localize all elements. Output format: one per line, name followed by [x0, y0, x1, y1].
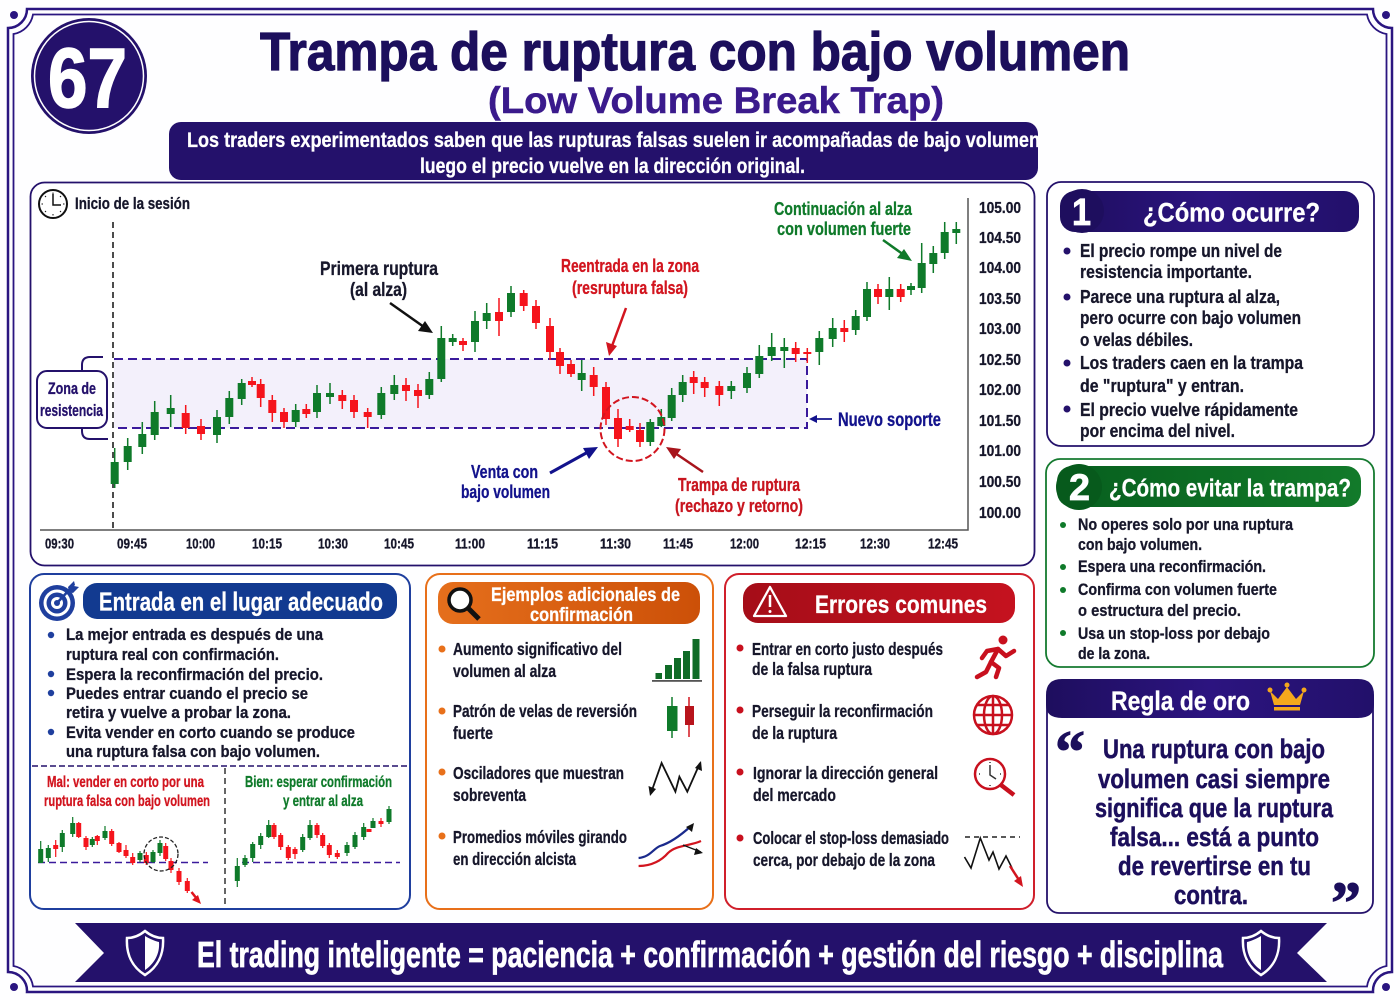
icon: shield right — [1243, 931, 1279, 975]
good example: y entrar al alza — [283, 793, 363, 810]
header: Errores comunes — [815, 591, 987, 619]
time axis labels — [45, 536, 958, 552]
panel: como evitar — [1046, 459, 1374, 667]
quote text: contra. — [1174, 880, 1248, 910]
bullet list: Aumento significativo del — [453, 639, 622, 659]
title: Trampa de ruptura con bajo volumen — [260, 22, 1130, 82]
price axis labels: 102.50 — [979, 352, 1021, 369]
annotation: venta con bajo volumen: Venta con — [471, 462, 538, 482]
annotation: venta con bajo volumen — [461, 447, 598, 502]
intro banner: luego el precio vuelve en la dirección original. — [420, 155, 805, 178]
bullet list: ruptura real con confirmación. — [66, 645, 279, 664]
bullet list — [48, 625, 355, 761]
bullet list: Confirma con volumen fuerte — [1078, 580, 1277, 599]
price axis labels: 104.50 — [979, 230, 1021, 247]
icon: tight stop-loss — [964, 837, 1023, 887]
panel: regla de oro: Regla de oro — [1111, 686, 1250, 716]
bullet list: resistencia importante. — [1080, 262, 1252, 282]
bullet list: fuerte — [453, 723, 493, 743]
resistance zone label: resistencia — [40, 401, 103, 420]
bullet list: o velas débiles. — [1080, 330, 1193, 350]
time axis labels: 10:45 — [384, 536, 414, 552]
annotation: primera ruptura — [320, 259, 438, 333]
bullet list: El precio vuelve rápidamente — [1080, 400, 1298, 420]
bullet list: retira y vuelve a probar la zona. — [66, 703, 291, 722]
quote text: falsa... está a punto — [1110, 822, 1319, 852]
bullet list: Parece una ruptura al alza, — [1080, 287, 1280, 307]
quote text: de revertirse en tu — [1118, 851, 1311, 881]
bullet list: Los traders caen en la trampa — [1080, 353, 1304, 373]
bullet list: Usa un stop-loss por debajo — [1078, 624, 1270, 643]
bullet list: Entrar en corto justo después — [752, 639, 943, 659]
axes — [40, 198, 968, 530]
annotation: reentrada: Reentrada en la zona — [561, 256, 700, 276]
price axis labels: 101.50 — [979, 413, 1021, 430]
time axis labels: 11:45 — [663, 536, 693, 552]
bullet list: Puedes entrar cuando el precio se — [66, 684, 308, 703]
annotation: trampa de ruptura: Trampa de ruptura — [678, 475, 801, 495]
time axis labels: 09:30 — [45, 536, 74, 552]
header 1 — [1060, 189, 1359, 234]
subtitle: (Low Volume Break Trap) — [488, 80, 944, 121]
time axis labels: 10:15 — [252, 536, 282, 552]
bullet list: Patrón de velas de reversión — [453, 701, 637, 721]
bullet list: o estructura del precio. — [1078, 601, 1241, 620]
bullet list: La mejor entrada es después de una — [66, 625, 323, 644]
icon: moving averages — [639, 823, 703, 866]
header 1: ¿Cómo ocurre? — [1143, 198, 1320, 228]
time axis labels: 12:15 — [795, 536, 826, 552]
bullet list: de la ruptura — [752, 723, 837, 743]
bullet list: una ruptura falsa con bajo volumen. — [66, 742, 320, 761]
time axis labels: 10:00 — [186, 536, 215, 552]
resistance zone label: Zona de — [48, 379, 96, 398]
header: Ejemplos adicionales de — [491, 585, 680, 606]
header: Entrada en el lugar adecuado — [99, 586, 383, 616]
header 1: 1 — [1072, 192, 1091, 234]
number badge 67: 67 — [48, 31, 127, 125]
time axis labels: 12:30 — [860, 536, 890, 552]
price axis labels: 102.00 — [979, 382, 1021, 399]
icon: warning — [754, 587, 786, 616]
intro banner — [169, 122, 1040, 180]
bullet list: cerca, por debajo de la zona — [753, 850, 935, 870]
header: confirmación — [530, 605, 633, 626]
quote text: volumen casi siempre — [1098, 764, 1330, 794]
trap circle — [600, 397, 664, 461]
bullet list: Osciladores que muestran — [453, 763, 624, 783]
time axis labels: 11:00 — [455, 536, 485, 552]
annotation: trampa de ruptura: (rechazo y retorno) — [675, 496, 803, 516]
time axis labels: 12:00 — [730, 536, 759, 552]
bad example — [38, 774, 210, 904]
annotation: continuacion: Continuación al alza — [774, 199, 913, 219]
annotation: nuevo soporte — [809, 410, 941, 431]
header 2 — [1056, 464, 1361, 510]
bottom ribbon — [75, 923, 1327, 982]
resistance zone label — [37, 357, 108, 439]
icon: runner — [977, 636, 1014, 677]
price axis labels: 100.50 — [979, 474, 1021, 491]
header — [438, 582, 700, 626]
bullet list: en dirección alcista — [453, 849, 576, 869]
icon: magnifier — [449, 589, 479, 619]
quote text: significa que la ruptura — [1095, 793, 1334, 823]
header 2: ¿Cómo evitar la trampa? — [1109, 474, 1351, 502]
panel: como ocurre — [1047, 182, 1374, 446]
bullet list: Colocar el stop-loss demasiado — [753, 828, 949, 848]
panel: regla de oro — [1046, 679, 1374, 936]
time axis labels: 12:45 — [928, 536, 958, 552]
bullet list: Evita vender en corto cuando se produce — [66, 723, 355, 742]
bullet list: por encima del nivel. — [1080, 421, 1235, 441]
quote marks: “ — [1055, 719, 1085, 785]
bullet list: Perseguir la reconfirmación — [752, 701, 933, 721]
price axis labels: 105.00 — [979, 200, 1021, 217]
bullet list: de "ruptura" y entran. — [1080, 376, 1244, 396]
panel: candlestick chart — [30, 182, 1034, 566]
panel: errores — [725, 574, 1034, 909]
resistance zone band — [114, 359, 807, 428]
intro banner: Los traders experimentados saben que las rupturas falsas suelen ir acompañadas de bajo volumen — [187, 129, 1040, 152]
bullet list — [1064, 241, 1304, 441]
time axis labels: 09:45 — [117, 536, 147, 552]
price axis labels: 100.00 — [979, 505, 1021, 522]
bullet list: con bajo volumen. — [1078, 535, 1202, 554]
session start marker: Inicio de la sesión — [75, 194, 190, 213]
session start marker — [39, 190, 190, 530]
bullet list: volumen al alza — [453, 661, 556, 681]
price axis labels: 103.50 — [979, 291, 1021, 308]
annotation: continuacion: con volumen fuerte — [777, 219, 911, 239]
bullet list: del mercado — [753, 785, 836, 805]
price axis labels — [979, 200, 1021, 522]
header 2: 2 — [1069, 467, 1090, 508]
time axis labels: 11:30 — [600, 536, 631, 552]
bullet list: Ignorar la dirección general — [753, 763, 938, 783]
bullet list — [1060, 515, 1293, 663]
price axis labels: 103.00 — [979, 321, 1021, 338]
annotation: primera ruptura: Primera ruptura — [320, 259, 438, 280]
panel: ejemplos — [426, 574, 713, 909]
bullet list: sobreventa — [453, 785, 526, 805]
time axis labels: 10:30 — [318, 536, 348, 552]
annotation: continuacion — [774, 199, 913, 261]
price axis labels: 104.00 — [979, 260, 1021, 277]
candles — [115, 222, 956, 488]
header — [743, 583, 1015, 623]
number badge 67 — [31, 18, 147, 134]
time axis labels: 11:15 — [527, 536, 558, 552]
annotation: reentrada — [561, 256, 700, 356]
bullet list: pero ocurre con bajo volumen — [1080, 308, 1301, 328]
annotation: trampa de ruptura — [666, 447, 803, 516]
icon: crown — [1268, 682, 1306, 710]
bullet list — [736, 639, 949, 870]
annotation: reentrada: (resruptura falsa) — [572, 278, 688, 298]
panel: entrada — [30, 574, 410, 909]
quote marks: ” — [1331, 870, 1361, 936]
quote text: Una ruptura con bajo — [1103, 734, 1325, 764]
quote marks — [1055, 719, 1361, 936]
icon: oscillator — [648, 761, 702, 796]
icon: shield left — [127, 931, 163, 975]
good example — [237, 774, 400, 887]
annotation: primera ruptura: (al alza) — [350, 280, 407, 301]
bad example: ruptura falsa con bajo volumen — [44, 793, 210, 810]
icon: clock magnifier — [975, 759, 1014, 795]
bad example: Mal: vender en corto por una — [47, 774, 204, 791]
bullet list — [438, 639, 637, 869]
annotation: venta con bajo volumen: bajo volumen — [461, 482, 550, 502]
bullet list: de la zona. — [1078, 644, 1150, 663]
annotation: nuevo soporte: Nuevo soporte — [838, 410, 941, 431]
bullet list: Espera la reconfirmación del precio. — [66, 665, 323, 684]
bullet list: Espera una reconfirmación. — [1078, 557, 1266, 576]
bullet list: Promedios móviles girando — [453, 827, 627, 847]
good example: Bien: esperar confirmación — [245, 774, 392, 791]
header — [83, 583, 397, 619]
icon: target — [39, 581, 79, 621]
price axis labels: 101.00 — [979, 443, 1021, 460]
bullet list: de la falsa ruptura — [752, 659, 872, 679]
bullet list: El precio rompe un nivel de — [1080, 241, 1282, 261]
bullet list: No operes solo por una ruptura — [1078, 515, 1293, 534]
icon: volume bars — [652, 639, 702, 682]
icon: reversal candles — [667, 697, 694, 738]
quote text — [1095, 734, 1334, 910]
icon: globe — [974, 696, 1012, 734]
